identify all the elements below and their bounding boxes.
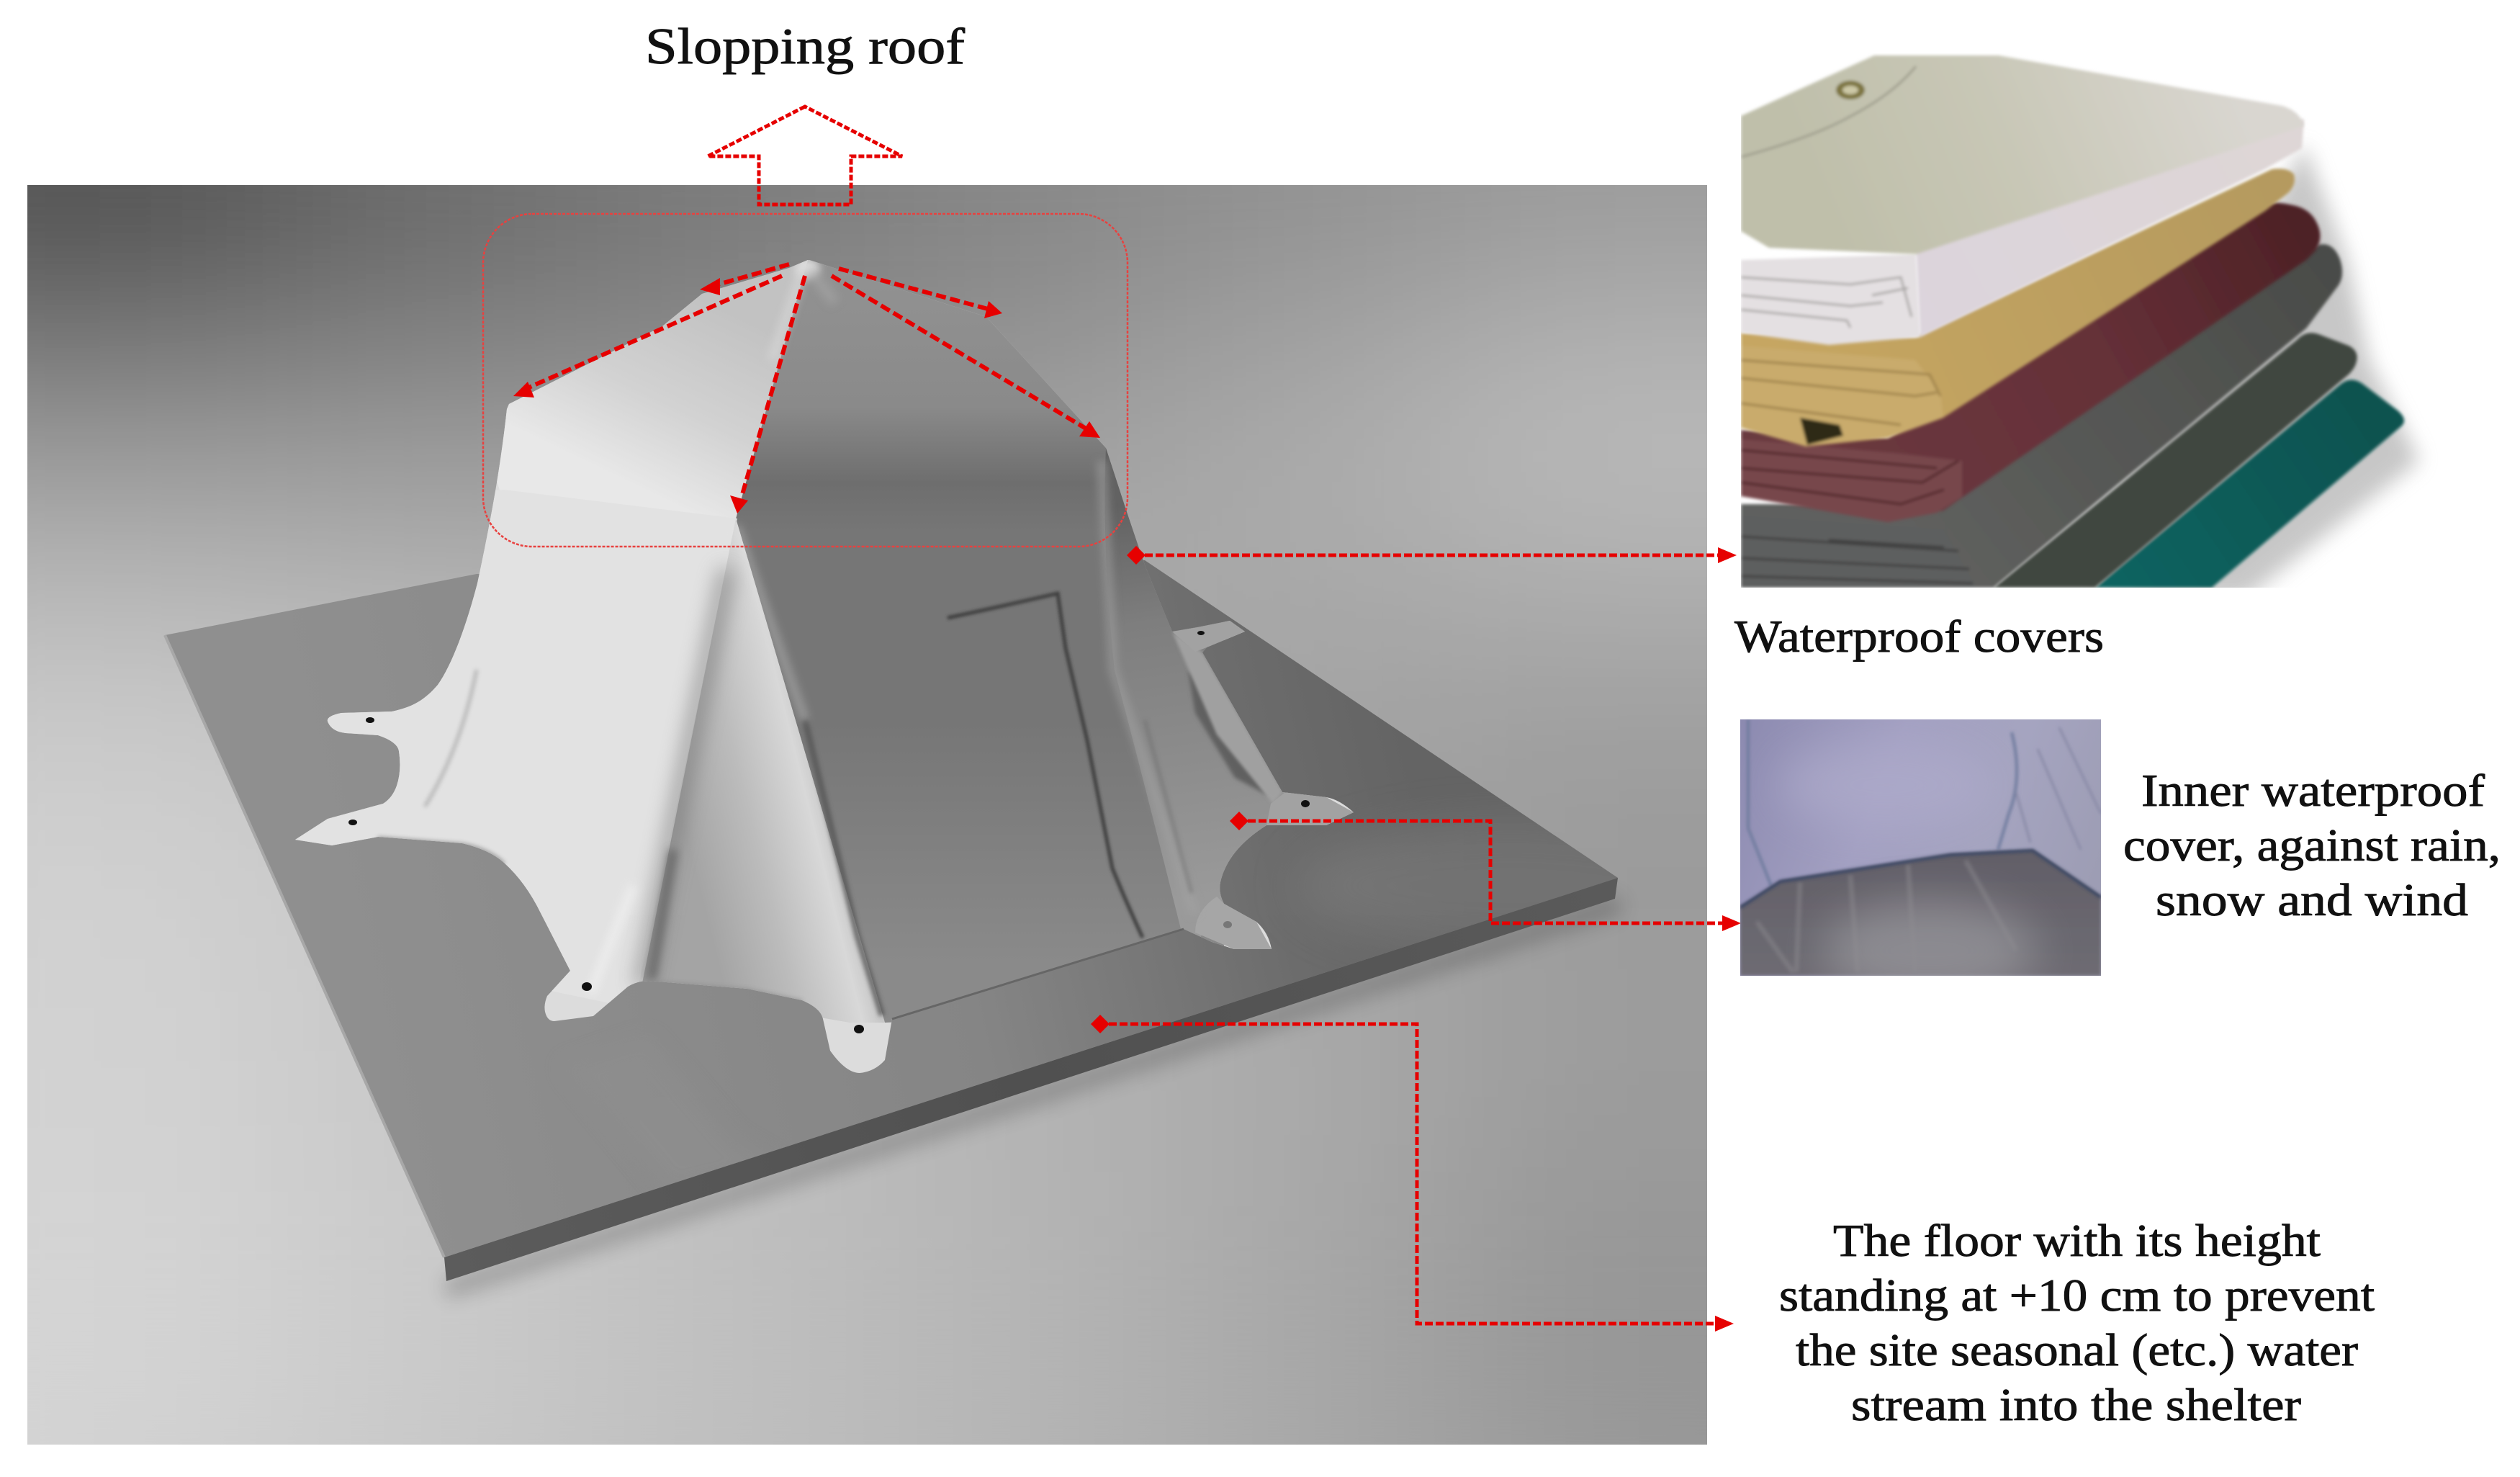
label: floor height: stream into the shelter <box>1851 1380 2301 1430</box>
label: inner waterproof cover <box>2123 766 2501 925</box>
top beige cover <box>1741 55 2304 254</box>
floor edge <box>1740 850 2101 907</box>
tent silhouette <box>0 0 1728 1440</box>
grey cover <box>1741 244 2342 588</box>
label: floor height: standing at +10 cm to prevent <box>1779 1270 2375 1321</box>
teal cover <box>2095 380 2404 588</box>
tan cover <box>1741 169 2295 446</box>
apex highlight <box>796 259 819 277</box>
heading: Slopping roof: Slopping roof <box>645 19 965 75</box>
label: Waterproof covers: Waterproof covers <box>1734 611 2104 662</box>
tent wall <box>1740 719 2101 976</box>
connector: inner cover <box>1230 812 1741 931</box>
platform top surface <box>165 560 1618 1257</box>
hollow up arrow above roof <box>708 107 902 205</box>
label: inner waterproof cover: Inner waterproof <box>2141 766 2485 816</box>
right side fabric <box>1104 448 1296 943</box>
render background gradient <box>27 185 1707 1445</box>
tent faces <box>288 216 1354 1023</box>
wall seams <box>1748 719 2101 886</box>
label: inner waterproof cover: cover, against rain, <box>2123 820 2501 871</box>
panel: 3D render of shelter <box>27 185 1707 1445</box>
anchor strip <box>1172 632 1282 804</box>
platform soft shadow <box>446 904 1620 1289</box>
white fold <box>1741 254 1920 345</box>
floor platform <box>165 560 1728 1281</box>
roof highlight frame <box>483 214 1128 547</box>
connector: waterproof covers <box>1127 546 1737 565</box>
dark grey cover <box>1994 333 2357 588</box>
anchor holes <box>348 631 1310 1033</box>
lilac flap <box>1916 119 2304 337</box>
photo: stacked waterproof covers <box>1741 55 2419 598</box>
label: floor height <box>1779 1216 2375 1430</box>
platform front side <box>444 878 1618 1281</box>
roof slope arrows <box>513 264 1100 513</box>
shadow wedge beside strip <box>1188 670 1269 796</box>
photo: inner waterproof cover <box>1740 719 2101 1001</box>
fold shadows <box>642 569 727 987</box>
front edge line <box>892 929 1184 1019</box>
anchor tabs right <box>1172 621 1354 825</box>
label: inner waterproof cover: snow and wind <box>2156 875 2468 925</box>
label: floor height: the site seasonal (etc.) water <box>1796 1325 2358 1375</box>
maroon cover <box>1741 202 2321 522</box>
platform left bevel <box>165 635 444 1257</box>
photo shadow <box>2088 144 2419 598</box>
door outline <box>948 593 1143 938</box>
connector: floor <box>1091 1015 1734 1332</box>
tent floor <box>1740 850 2101 976</box>
label: floor height: The floor with its height <box>1833 1216 2321 1266</box>
tent shelter <box>295 260 1354 1073</box>
